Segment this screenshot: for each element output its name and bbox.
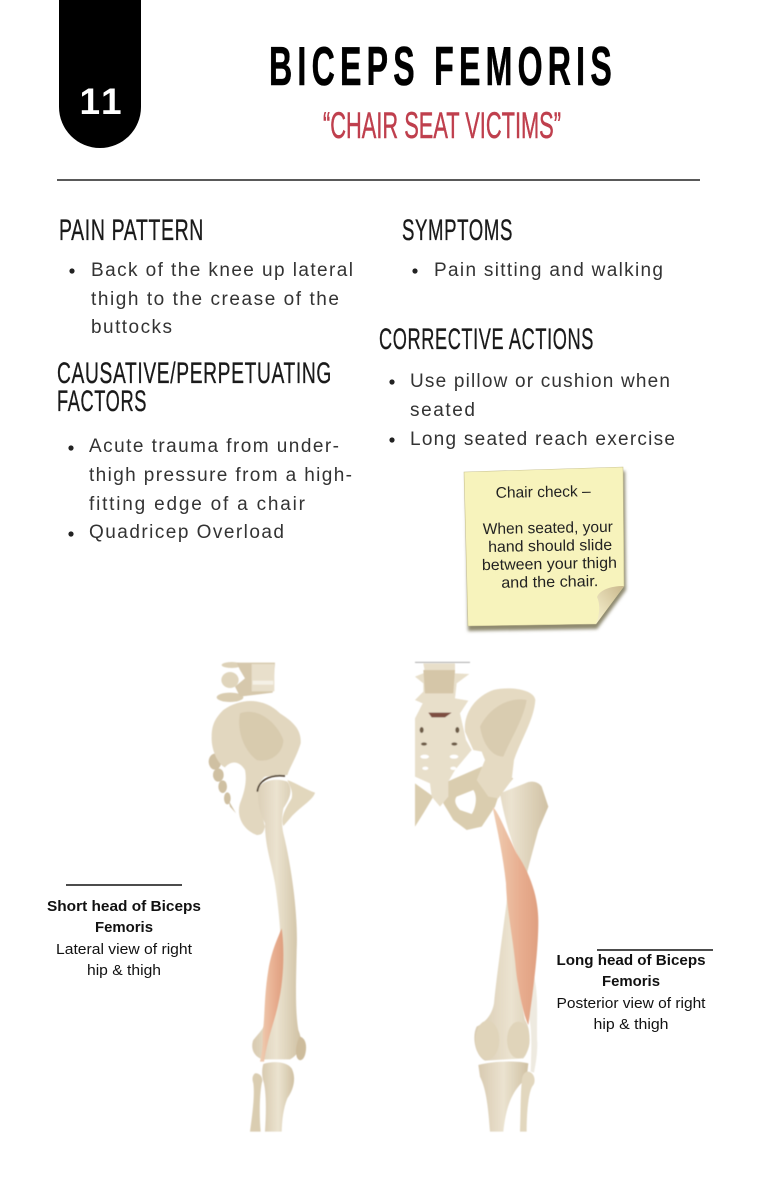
tendon bbox=[527, 977, 537, 1073]
callout: sticky note: Chair check – bbox=[496, 483, 591, 502]
coccyx bbox=[209, 754, 236, 813]
femur bbox=[474, 782, 548, 1061]
pain pattern list: buttocks bbox=[91, 317, 172, 338]
callout: sticky note: and the chair. bbox=[501, 573, 598, 592]
label: short head of biceps femoris: hip & thigh bbox=[87, 962, 161, 979]
corrective actions list: Use pillow or cushion when bbox=[410, 371, 670, 392]
label: long head of biceps femoris: hip & thigh bbox=[594, 1016, 668, 1033]
callout: sticky note: between your thigh bbox=[482, 555, 617, 574]
panel: causative factors bbox=[57, 357, 352, 543]
label: long head of biceps femoris bbox=[556, 950, 713, 1033]
causative factors list: Acute trauma from under- bbox=[89, 436, 339, 457]
label: short head of biceps femoris bbox=[47, 885, 201, 979]
hip joint line bbox=[257, 776, 285, 792]
label: long head of biceps femoris: Femoris bbox=[602, 973, 660, 990]
patella bbox=[296, 1037, 306, 1060]
label: long head of biceps femoris: Posterior view of right bbox=[556, 995, 706, 1012]
sacral foramina bbox=[420, 727, 459, 746]
callout: sticky note: When seated, your bbox=[483, 519, 613, 538]
lumbar vertebrae and sacrum bbox=[415, 663, 472, 807]
pubis bbox=[282, 780, 315, 826]
subtitle: “CHAIR SEAT VICTIMS” bbox=[323, 105, 561, 146]
heading: symptoms: SYMPTOMS bbox=[402, 214, 513, 247]
heading: pain pattern: PAIN PATTERN bbox=[59, 214, 204, 247]
callout: sticky note bbox=[464, 467, 626, 631]
number tab bbox=[59, 0, 141, 148]
label: short head of biceps femoris: Femoris bbox=[95, 919, 153, 936]
symptoms list: Pain sitting and walking bbox=[434, 260, 663, 281]
femur bbox=[252, 780, 301, 1059]
tibia bbox=[262, 1062, 294, 1132]
pelvis lower ring bbox=[415, 767, 513, 830]
panel: pain pattern bbox=[59, 214, 353, 338]
ilium bbox=[465, 688, 535, 798]
heading: corrective actions: CORRECTIVE ACTIONS bbox=[379, 323, 594, 356]
heading: causative factors bbox=[57, 357, 332, 418]
vertebrae bbox=[217, 662, 275, 702]
panel: symptoms bbox=[402, 214, 663, 281]
iliac shading bbox=[480, 699, 527, 757]
heading: causative factors: CAUSATIVE/PERPETUATING bbox=[57, 357, 332, 390]
callout: sticky note: hand should slide bbox=[488, 537, 612, 556]
panel: corrective actions bbox=[379, 323, 675, 450]
causative factors list bbox=[68, 436, 352, 543]
pain pattern list bbox=[69, 260, 353, 338]
corrective actions list bbox=[389, 371, 675, 450]
iliac fossa shading bbox=[239, 712, 283, 761]
causative factors list: thigh pressure from a high- bbox=[89, 465, 352, 486]
label: short head of biceps femoris: Short head of Biceps bbox=[47, 898, 201, 915]
pain pattern list: thigh to the crease of the bbox=[91, 289, 339, 310]
causative factors list: Quadricep Overload bbox=[89, 522, 284, 543]
short head muscle bbox=[260, 928, 283, 1062]
long head muscle bbox=[493, 807, 538, 1025]
fibula bbox=[250, 1073, 262, 1132]
tibia bbox=[478, 1062, 528, 1132]
knee condyles bbox=[475, 1021, 499, 1059]
fibula bbox=[520, 1072, 535, 1132]
number tab: 11 bbox=[79, 81, 125, 122]
heading: causative factors: FACTORS bbox=[57, 385, 147, 418]
corrective actions list: seated bbox=[410, 400, 475, 421]
corrective actions list: Long seated reach exercise bbox=[410, 429, 675, 450]
pelvis bbox=[212, 701, 301, 835]
label: long head of biceps femoris: Long head of Biceps bbox=[556, 952, 706, 969]
pain pattern list: Back of the knee up lateral bbox=[91, 260, 353, 281]
anatomy figure: posterior view of hip and thigh bbox=[415, 662, 548, 1132]
anatomy figure: lateral view of hip and thigh bbox=[209, 662, 315, 1132]
causative factors list: fitting edge of a chair bbox=[89, 494, 306, 515]
label: short head of biceps femoris: Lateral view of right bbox=[56, 941, 193, 958]
